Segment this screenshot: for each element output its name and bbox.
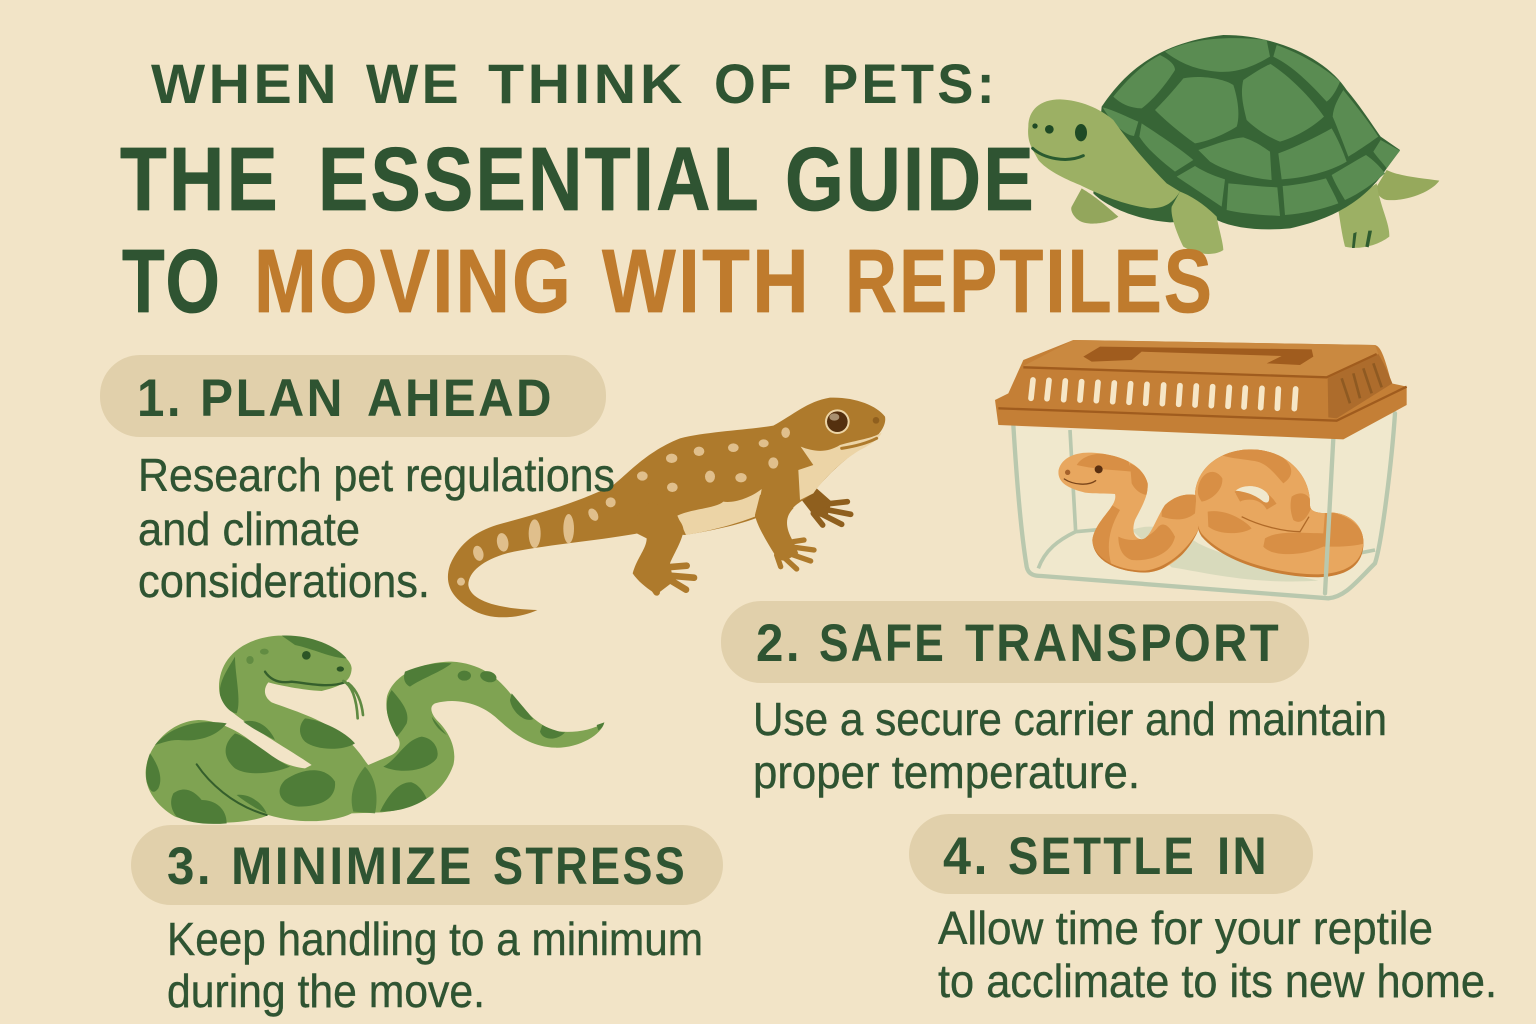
title: first two lines [120,52,1036,230]
glass front edges [1013,413,1395,598]
kicker heading: WE [366,52,462,115]
kicker heading: OF [714,52,795,115]
main heading line [120,130,1036,230]
step 2 body text: proper temperature. [753,746,1140,798]
step 2 heading [756,614,1281,673]
title: third line [122,232,1214,332]
step 4 heading [943,827,1269,886]
highlighted heading words: MOVING [254,232,573,332]
icon: lizard [448,398,885,617]
highlighted heading words: REPTILES [845,232,1214,332]
step 4 body text: to acclimate to its new home. [938,955,1497,1007]
step 1 body text [138,449,615,607]
step 4 body text: Allow time for your reptile [938,902,1433,954]
step 3 body text [167,913,703,1017]
step 3 heading: 3. [167,837,213,896]
step 1 body text: considerations. [138,555,430,607]
icon: carrier with orange snake [995,340,1407,598]
step 2 heading: TRANSPORT [965,614,1281,673]
panel: step 4 settle in [909,814,1497,1007]
kicker heading: PETS: [822,52,998,115]
step 4 body text [938,902,1497,1007]
icon: green snake [146,636,604,824]
step 4 heading: IN [1217,827,1269,886]
step 3 body text: during the move. [167,965,485,1017]
glass tank [1013,415,1395,598]
panel: step 2 safe transport [721,601,1387,798]
step 2 heading: 2. [756,614,802,673]
kicker heading: WHEN [151,52,340,115]
panel: step 1 plan ahead [100,355,615,607]
step 4 heading: 4. [943,827,990,886]
step 1 heading: 1. [137,369,183,428]
step 4 heading: SETTLE [1008,827,1196,886]
main heading line: GUIDE [785,130,1036,230]
main heading line: THE [120,130,280,230]
kicker heading: THINK [488,52,686,115]
highlighted heading words: WITH [602,232,811,332]
panel: step 3 minimize stress [131,825,723,1017]
icon: turtle [1028,35,1439,254]
step 4 pill [909,814,1313,894]
step 3 heading: MINIMIZE [231,837,474,896]
step 1 body text: and climate [138,503,360,555]
step 1 body text: Research pet regulations [138,449,615,501]
step 2 pill [721,601,1309,683]
step 3 heading [167,837,687,896]
step 1 heading: AHEAD [367,369,554,428]
step 1 pill [100,355,606,437]
orange snake [1055,446,1368,580]
kicker heading [151,52,998,115]
step 1 heading: PLAN [200,369,345,428]
step 2 heading: SAFE [819,614,946,673]
step 1 heading [137,369,554,428]
step 3 body text: Keep handling to a minimum [167,913,703,965]
step 3 pill [131,825,723,905]
step 2 body text [753,693,1387,798]
step 2 body text: Use a secure carrier and maintain [753,693,1387,745]
step 3 heading: STRESS [493,837,687,896]
highlighted heading words [254,232,1214,332]
main heading line: ESSENTIAL [318,130,761,230]
title: third line: TO [122,232,222,332]
lid [995,340,1407,439]
